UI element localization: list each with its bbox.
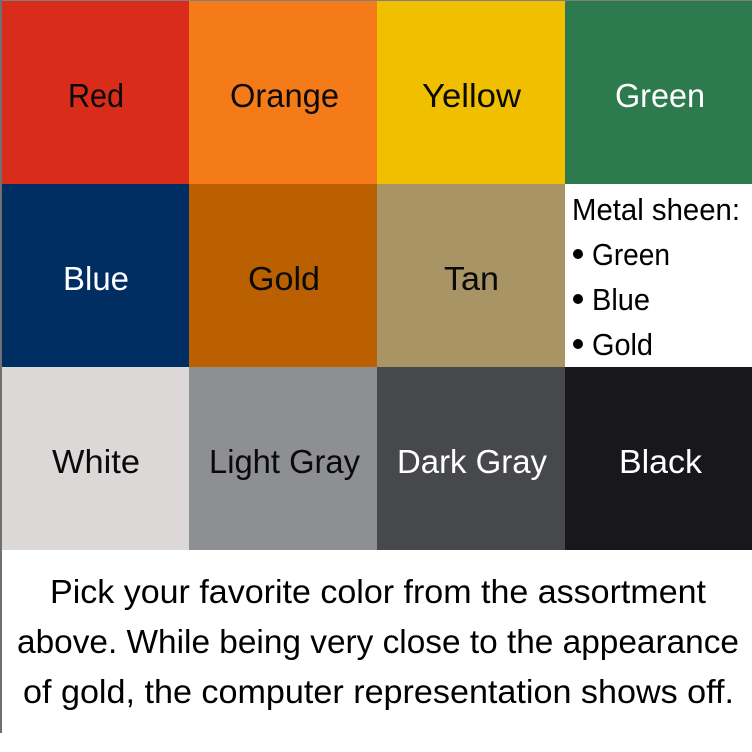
swatch: white <box>0 367 189 550</box>
swatch: blue: Blue <box>63 260 129 297</box>
list item: gold: Gold <box>592 327 653 362</box>
swatch: tan: Tan <box>444 260 499 297</box>
swatch: gold <box>189 184 377 367</box>
swatch: black <box>565 367 752 550</box>
swatch: dark gray <box>377 367 565 550</box>
swatch: green <box>565 0 752 184</box>
swatch: blue <box>0 184 189 367</box>
caption text block <box>17 573 739 710</box>
panel: metal sheen list <box>565 184 752 367</box>
list item: green: Green <box>592 237 670 272</box>
swatch: tan <box>377 184 565 367</box>
caption text block: above. While being very close to the appearance <box>17 623 739 660</box>
list heading: Metal sheen: <box>572 192 740 227</box>
swatch: light gray <box>189 367 377 550</box>
swatch: yellow: Yellow <box>422 77 521 114</box>
swatch grid <box>0 0 752 550</box>
swatch: red <box>0 0 189 184</box>
swatch: orange: Orange <box>230 77 339 114</box>
swatch: light gray: Light Gray <box>209 443 360 480</box>
swatch: black: Black <box>619 443 703 480</box>
swatch: white: White <box>52 443 140 480</box>
list item: blue: Blue <box>592 282 650 317</box>
caption text block: Pick your favorite color from the assortment <box>50 573 706 610</box>
swatch: red: Red <box>68 77 124 114</box>
swatch: green: Green <box>615 77 705 114</box>
swatch: orange <box>189 0 377 184</box>
swatch: gold: Gold <box>248 260 320 297</box>
caption text block: of gold, the computer representation shows off. <box>23 673 734 710</box>
swatch: dark gray: Dark Gray <box>397 443 547 480</box>
swatch: yellow <box>377 0 565 184</box>
